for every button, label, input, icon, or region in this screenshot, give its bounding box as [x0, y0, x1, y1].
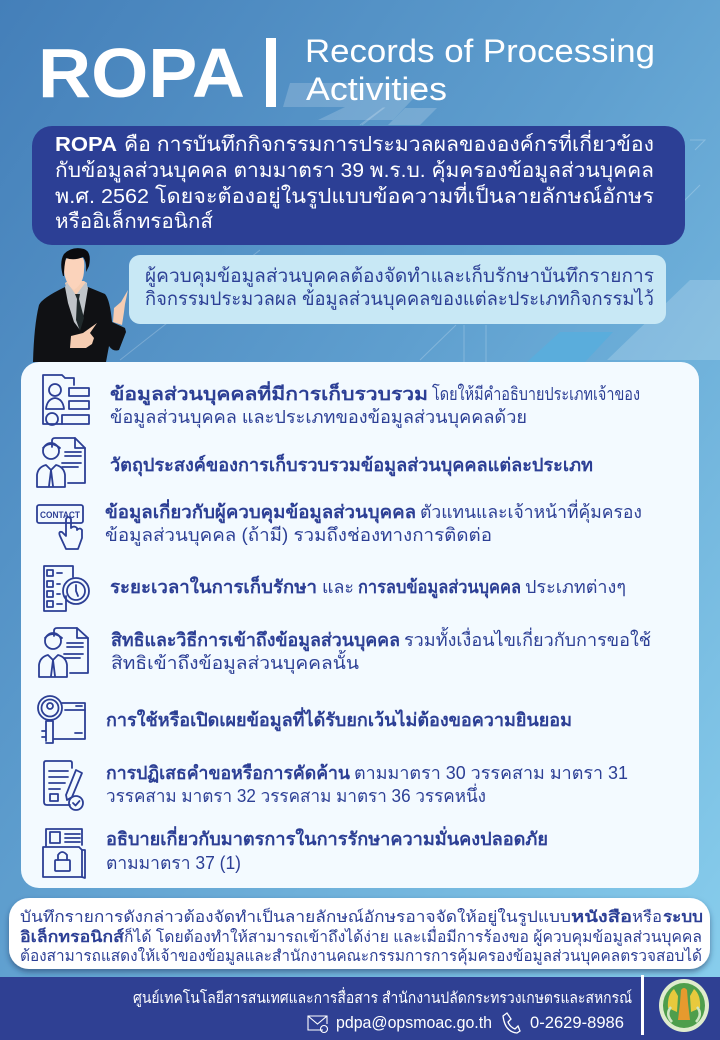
text: [110, 575, 626, 599]
text: ตัวแทนและเจ้าหน้าที่คุ้มครอง: [420, 499, 642, 523]
logo: ministry seal: [659, 979, 709, 1032]
footer divider: [641, 975, 644, 1035]
icon: officer with document: [37, 438, 85, 487]
text: สิทธิและวิธีการเข้าถึงข้อมูลส่วนบุคคล: [111, 630, 400, 652]
panel: closing note: ก็ได้ โดยต้องทำให้สามารถเข้าถึงได้ง่าย และเมื่อมีการร้องขอ ผู้ควบคุมข้อมูลส่วนบุคคล: [124, 926, 702, 947]
icon: contact button: CONTACT: [40, 510, 80, 521]
text: [105, 499, 642, 546]
item 1: [43, 375, 640, 428]
subtitle: [305, 33, 655, 107]
panel: closing note: หรือ: [632, 908, 662, 926]
icon: key and folder: [38, 696, 85, 743]
panel: ROPA definition: คือ การบันทึกกิจกรรมการประมวลผลขององค์กรที่เกี่ยวข้อง: [124, 130, 654, 156]
text: การใช้หรือเปิดเผยข้อมูลที่ได้รับยกเว้นไม่ต้องขอความยินยอม: [106, 707, 572, 732]
item 8: [43, 826, 548, 878]
text: การปฏิเสธคำขอหรือการคัดค้าน: [106, 763, 351, 783]
icon: signed form: [44, 761, 83, 810]
panel: ROPA definition: ROPA: [55, 133, 117, 156]
icon: personal data file: [43, 375, 89, 425]
text: ตามมาตรา 30 วรรคสาม มาตรา 31: [354, 763, 628, 783]
text: ข้อมูลเกี่ยวกับผู้ควบคุมข้อมูลส่วนบุคคล: [105, 499, 416, 524]
callout: controller duty: ผู้ควบคุมข้อมูลส่วนบุคคลต้องจัดทำและเก็บรักษาบันทึกรายการ: [145, 263, 654, 288]
title: [38, 33, 655, 112]
text: ระยะเวลาในการเก็บรักษา: [110, 575, 317, 597]
panel: closing note: ระบบ: [663, 909, 703, 926]
decorative circuit pattern: [120, 83, 720, 362]
text: รวมทั้งเงื่อนไขเกี่ยวกับการขอใช้: [404, 627, 651, 650]
item 2: [37, 438, 593, 487]
icon: officer with document: [39, 628, 88, 677]
text: โดยให้มีคำอธิบายประเภทเจ้าของ: [432, 383, 640, 404]
text: วรรคสาม มาตรา 32 วรรคสาม มาตรา 36 วรรคหนึ่ง: [106, 783, 486, 806]
illustration: businessman pointing: [33, 248, 128, 362]
subtitle: Activities: [306, 71, 447, 107]
text: การลบข้อมูลส่วนบุคคล: [358, 577, 521, 599]
item 6: [38, 696, 572, 743]
panel: ROPA definition: หรืออิเล็กทรอนิกส์: [55, 207, 213, 233]
panel: closing note: บันทึกรายการดังกล่าวต้องจัดทำเป็นลายลักษณ์อักษรอาจจัดให้อยู่ในรูปแบบ: [20, 907, 571, 927]
item 7: [44, 761, 628, 810]
panel: closing note: ต้องสามารถแสดงให้เจ้าของข้อมูลและสำนักงานคณะกรรมการการคุ้มครองข้อมูลส่วนบุคคลตรวจสอบได้: [20, 947, 702, 966]
item 3: [37, 499, 642, 549]
text: สิทธิเข้าถึงข้อมูลส่วนบุคคลนั้น: [111, 650, 359, 674]
panel: required record contents: [21, 362, 699, 888]
callout: controller duty: [129, 255, 666, 324]
footer: [0, 975, 720, 1040]
organisation name: ศูนย์เทคโนโลยีสารสนเทศและการสื่อสาร สำนักงานปลัดกระทรวงเกษตรและสหกรณ์: [133, 987, 632, 1008]
text: ข้อมูลส่วนบุคคล และประเภทของข้อมูลส่วนบุคคลด้วย: [110, 407, 527, 428]
item 4: [44, 566, 626, 611]
text: [111, 627, 651, 674]
title divider: [266, 38, 276, 107]
text: [110, 381, 640, 428]
text: ประเภทต่างๆ: [525, 577, 626, 597]
panel: closing note: หนังสือ: [571, 908, 632, 926]
text: [106, 763, 628, 806]
subtitle: Records of Processing: [305, 33, 655, 69]
phone number: 0-2629-8986: [530, 1013, 624, 1032]
text: ข้อมูลส่วนบุคคล (ถ้ามี) รวมถึงช่องทางการติดต่อ: [105, 525, 492, 546]
panel: ROPA definition: [32, 126, 685, 245]
item 5: [39, 627, 651, 677]
icon: phone: [503, 1013, 520, 1033]
text: [106, 826, 548, 873]
icon: checklist and clock: [44, 566, 89, 611]
panel: ROPA definition: กับข้อมูลส่วนบุคคล ตามมาตรา 39 พ.ร.บ. คุ้มครองข้อมูลส่วนบุคคล: [55, 159, 654, 183]
icon: email: [308, 1016, 328, 1032]
panel: ROPA definition: พ.ศ. 2562 โดยจะต้องอยู่ในรูปแบบข้อความที่เป็นลายลักษณ์อักษร: [55, 182, 654, 209]
email address: pdpa@opsmoac.go.th: [336, 1013, 492, 1032]
text: วัตถุประสงค์ของการเก็บรวบรวมข้อมูลส่วนบุคคลแต่ละประเภท: [110, 453, 593, 477]
panel: closing note: [9, 898, 710, 969]
callout: controller duty: กิจกรรมประมวลผล ข้อมูลส่วนบุคคลของแต่ละประเภทกิจกรรมไว้: [145, 288, 654, 311]
text: อธิบายเกี่ยวกับมาตรการในการรักษาความมั่นคงปลอดภัย: [106, 826, 548, 849]
text: และ: [322, 577, 354, 597]
title: ROPA: ROPA: [38, 34, 245, 112]
text: ตามมาตรา 37 (1): [106, 853, 241, 873]
icon: contact button: [37, 505, 83, 549]
panel: closing note: อิเล็กทรอนิกส์: [20, 926, 125, 946]
icon: locked folder: [43, 829, 85, 878]
text: ข้อมูลส่วนบุคคลที่มีการเก็บรวบรวม: [110, 381, 428, 406]
